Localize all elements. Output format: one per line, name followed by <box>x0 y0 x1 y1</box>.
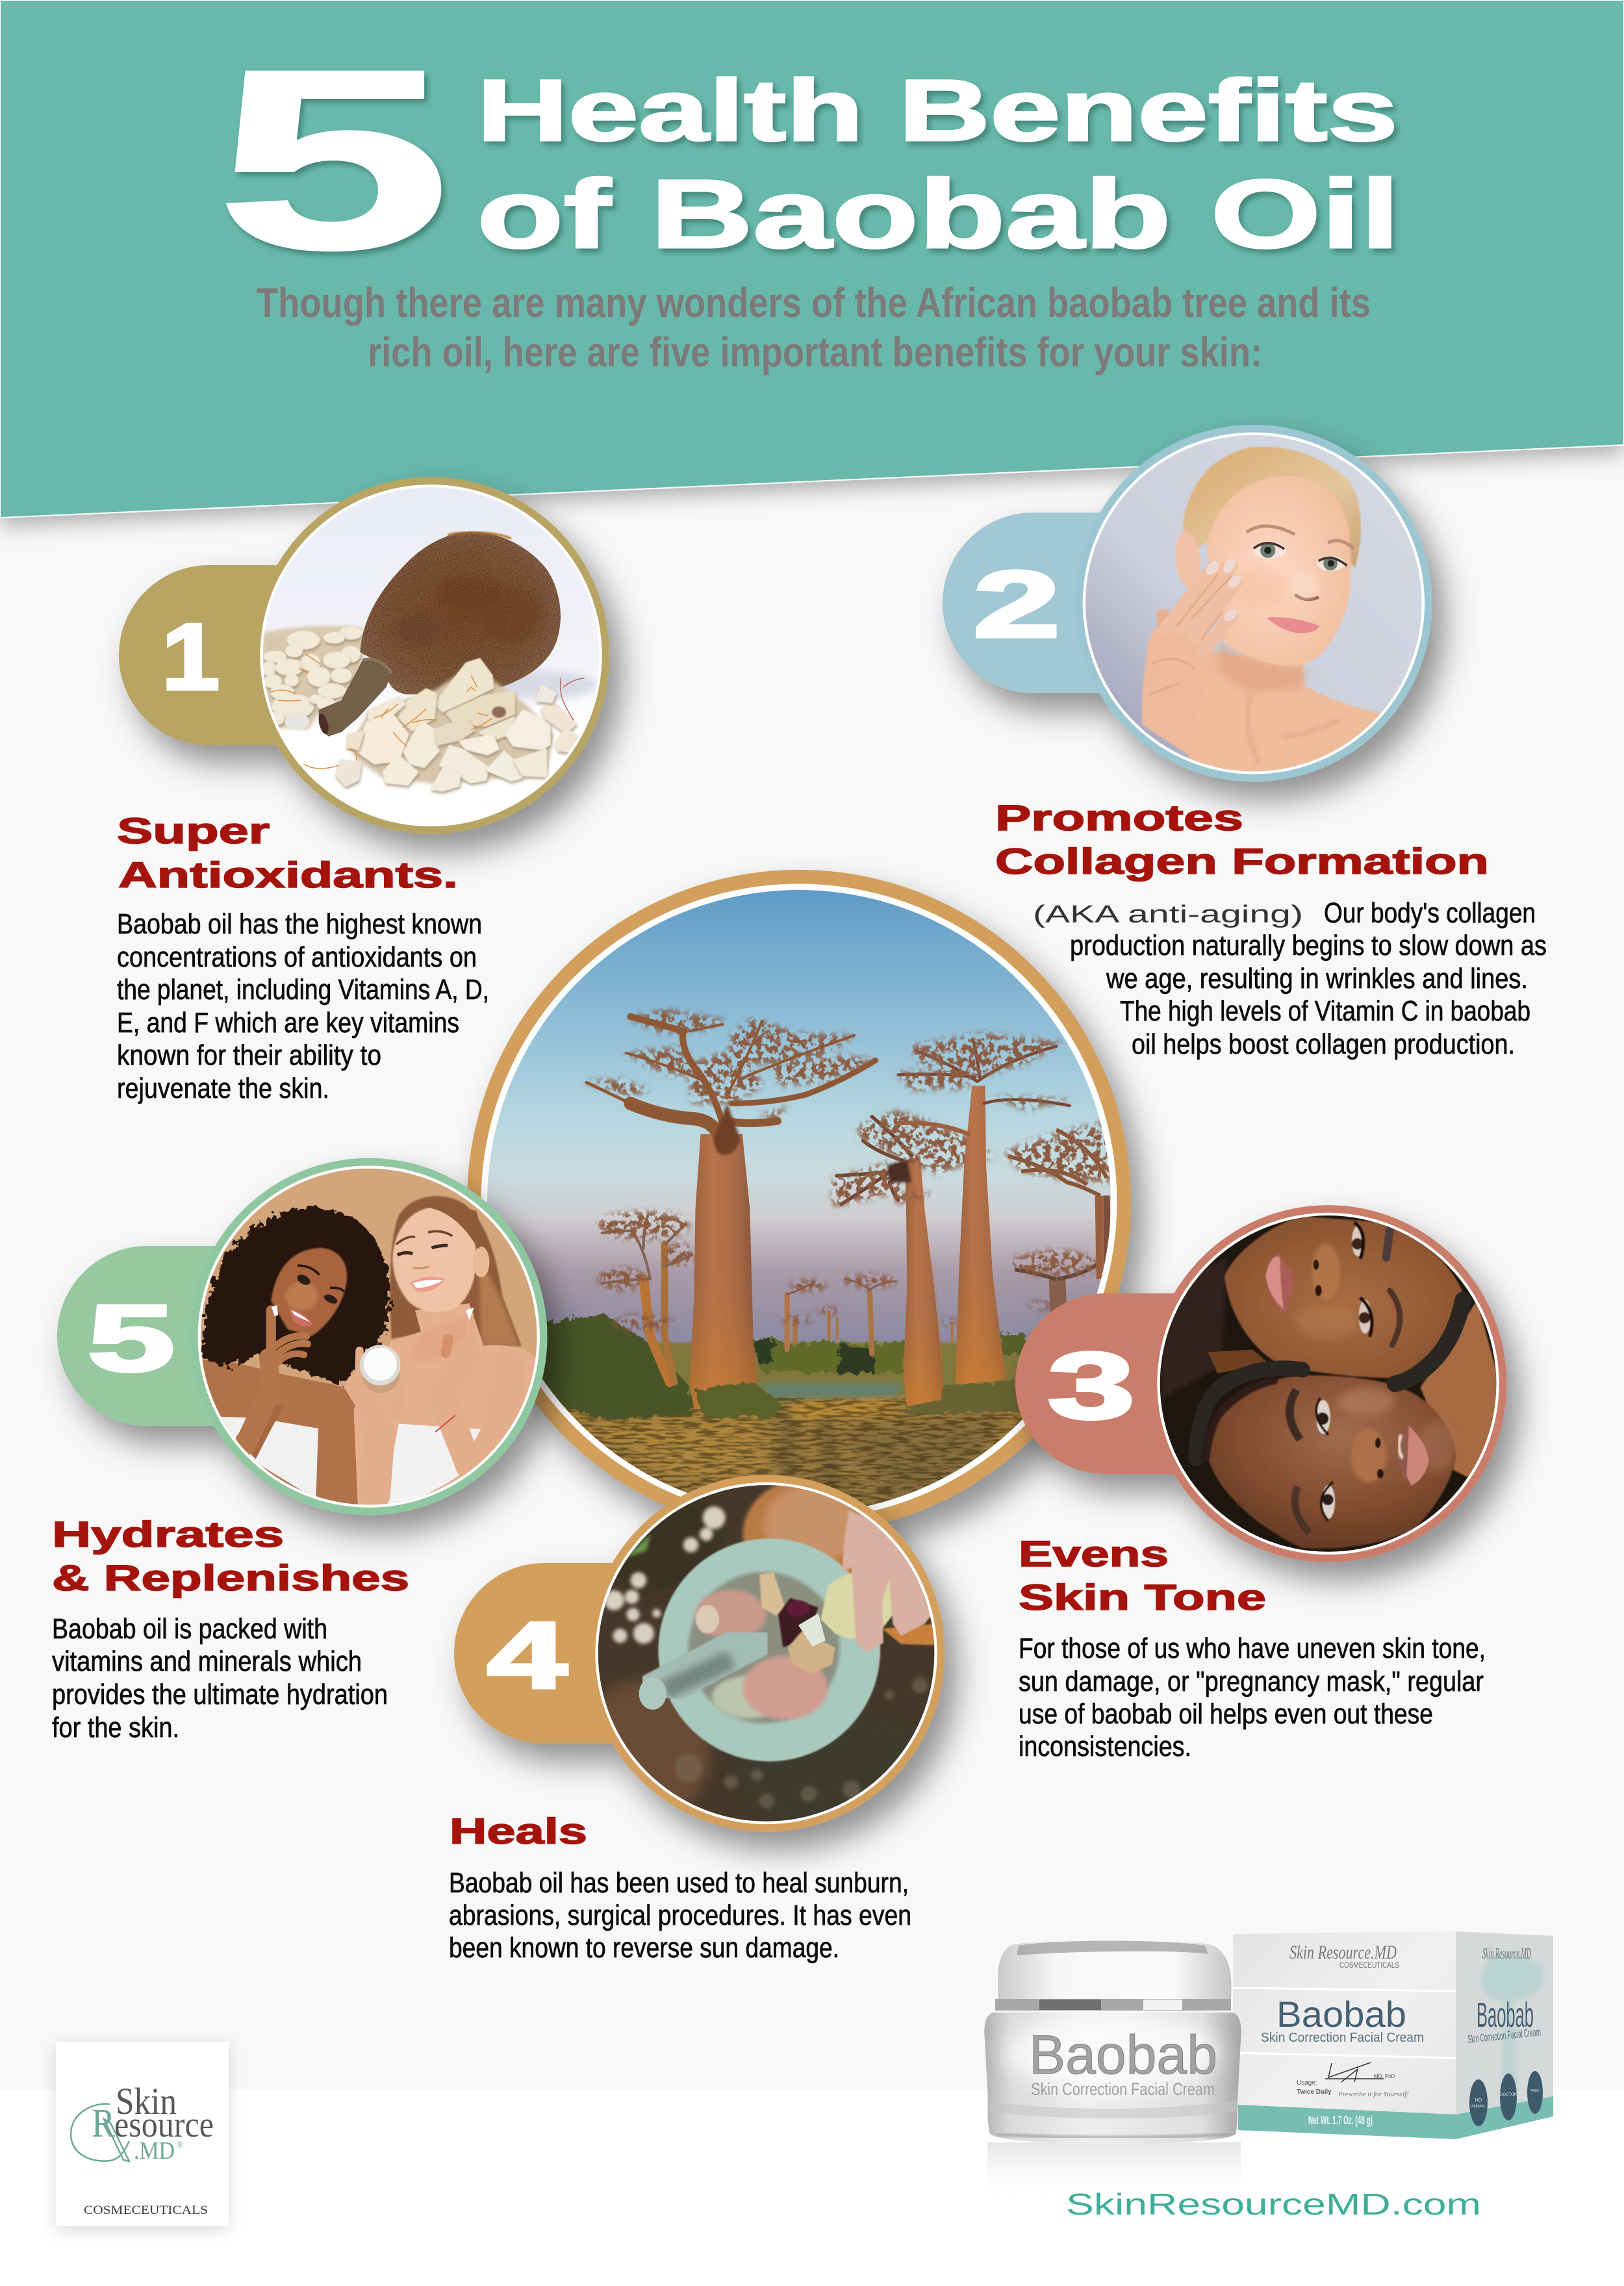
photo: baobab fruit and pulp <box>247 468 617 838</box>
bottom lips <box>1403 1425 1428 1486</box>
number 3: 3 <box>1048 1333 1135 1438</box>
jar <box>362 1355 400 1393</box>
box side text: Skin Correction Facial Cream <box>1467 2026 1542 2046</box>
logo text: ® <box>177 2140 184 2150</box>
tree 4 right edge <box>1004 1121 1111 1279</box>
body copy: the planet, including Vitamins A, D, <box>117 974 489 1006</box>
body copy: we age, resulting in wrinkles and lines. <box>1106 963 1528 995</box>
braids <box>1196 1300 1463 1458</box>
box front text <box>1261 1942 1424 2127</box>
photo: two women lying head to head <box>1147 1199 1517 1569</box>
neck shoulders <box>1187 652 1402 784</box>
right body <box>353 1303 535 1518</box>
header banner <box>0 0 1624 518</box>
product: cream jar: Skin Correction Facial Cream <box>1031 2079 1215 2099</box>
heading: Skin Tone <box>1019 1577 1266 1618</box>
pill 5 <box>57 1246 369 1426</box>
text block: Super Antioxidants <box>117 810 489 1104</box>
website url: SkinResourceMD.com <box>1066 2187 1481 2221</box>
hair <box>1183 447 1361 567</box>
subtitle <box>257 279 1371 375</box>
pill 1 <box>119 565 431 745</box>
logo text: Skin <box>116 2080 177 2122</box>
body copy <box>1019 1632 1486 1762</box>
number 5: 5 <box>88 1286 175 1391</box>
photo: mortar, pestle and oil <box>577 1468 955 1838</box>
box front text: Skin Resource.MD <box>1289 1942 1397 1963</box>
box front text: Twice Daily <box>1297 2089 1332 2096</box>
bottle <box>821 1573 895 1640</box>
stem <box>319 659 391 737</box>
heading: Heals <box>450 1810 587 1851</box>
left hand <box>245 1310 308 1445</box>
logo text: .MD <box>134 2137 175 2165</box>
body copy: vitamins and minerals which <box>52 1645 362 1677</box>
box front text: Net Wt. 1.7 Oz. (48 g) <box>1308 2114 1373 2127</box>
left face <box>271 1248 347 1336</box>
right towel <box>382 1424 487 1518</box>
top eyes and brows <box>1352 1226 1364 1256</box>
threads <box>270 654 585 768</box>
product: cream jar <box>984 1939 1241 2201</box>
left pulp pile <box>261 626 362 730</box>
jar label: Baobab <box>1029 2024 1217 2085</box>
subtitle: Though there are many wonders of the African baobab tree and its <box>257 279 1371 326</box>
logo text: esource <box>114 2105 214 2145</box>
left body <box>203 1360 359 1518</box>
box front teal band <box>1238 2105 1456 2139</box>
body copy: The high levels of Vitamin C in baobab <box>1120 995 1530 1027</box>
bush over tree 1 base <box>694 1382 780 1417</box>
far trees <box>781 1275 959 1354</box>
heading <box>1019 1533 1266 1618</box>
number 1: 1 <box>162 604 220 709</box>
jar reflection <box>987 2142 1241 2201</box>
box front text: Skin Correction Facial Cream <box>1261 2031 1424 2045</box>
product: cream box <box>1233 1931 1553 2139</box>
big numeral 5: 5 <box>215 16 451 303</box>
panel: benefit 1 Super Antioxidants badge and photo <box>119 468 617 838</box>
box side text: ANIMAL <box>1471 2105 1486 2109</box>
text block: Evens Skin Tone <box>1019 1533 1486 1762</box>
jar lid <box>998 1939 1232 2000</box>
hand <box>842 1510 932 1653</box>
box side <box>1456 1931 1553 2139</box>
top nose <box>1312 1243 1340 1300</box>
number 4: 4 <box>487 1603 567 1708</box>
logo text <box>84 2080 214 2217</box>
pestle <box>653 1638 757 1692</box>
panel: benefit 2 Promotes Collagen Formation badge and photo <box>943 416 1442 786</box>
panel: benefit 5 Hydrates and Replenishes badge and photo <box>57 1150 559 1520</box>
top lips <box>1266 1254 1293 1314</box>
body copy: Baobab oil has the highest known <box>117 908 482 940</box>
ear <box>1173 531 1203 589</box>
fruit <box>360 531 561 694</box>
box front text: Prescribe it for Yourself! <box>1338 2090 1409 2098</box>
logo swoosh <box>71 2104 129 2161</box>
subtitle: rich oil, here are five important benefits for your skin: <box>368 329 1262 375</box>
panel: benefit 3 Evens Skin Tone badge and photo <box>1015 1199 1517 1569</box>
box front text: Baobab <box>1276 1994 1406 2035</box>
right arm <box>359 1315 507 1495</box>
right face <box>392 1206 476 1312</box>
jar metal ring <box>995 1999 1231 2011</box>
text block: Promotes Collagen Formation <box>995 797 1547 1060</box>
upper face <box>1224 1216 1463 1378</box>
box side text: Skin Resource.MD <box>1482 1946 1531 1962</box>
photo: two women with cream <box>188 1150 559 1520</box>
blossoms <box>604 1506 726 1644</box>
tree 1 <box>583 1009 876 1408</box>
logo text: R <box>92 2102 116 2146</box>
title line 2: of Baobab Oil <box>477 159 1400 268</box>
lower face <box>1207 1375 1456 1549</box>
body copy: oil helps boost collagen production. <box>1132 1028 1515 1060</box>
body copy: Our body's collagen <box>1324 897 1536 929</box>
box front text: COSMECEUTICALS <box>1339 1961 1399 1970</box>
heading: Collagen Formation <box>995 841 1489 882</box>
tree 3 <box>832 1110 995 1406</box>
panel: benefit 4 Heals badge and photo <box>454 1468 955 1838</box>
body copy: concentrations of antioxidants on <box>117 941 477 973</box>
box side text: NO <box>1475 2098 1482 2103</box>
wooden bowl <box>743 1478 875 1591</box>
box side text: Baobab <box>1477 1996 1534 2035</box>
heading <box>995 797 1489 882</box>
tree 2 <box>896 1033 1074 1384</box>
contents <box>743 1656 828 1720</box>
body copy: E, and F which are key vitamins <box>117 1007 459 1039</box>
photo: woman touching face <box>1072 416 1442 786</box>
pill 2 <box>943 513 1254 693</box>
heading: Antioxidants. <box>118 854 458 895</box>
body copy: been known to reverse sun damage. <box>449 1932 839 1964</box>
title <box>215 16 1400 303</box>
body copy <box>52 1613 388 1744</box>
title line 1: Health Benefits <box>477 62 1398 159</box>
box side text: FREE <box>1530 2089 1540 2093</box>
heading: Promotes <box>995 797 1243 838</box>
heading <box>117 810 458 895</box>
box side text <box>1467 1946 1543 2126</box>
white footer band <box>0 2089 1624 2286</box>
jar glass <box>984 2013 1241 2144</box>
bottom nose <box>1351 1429 1386 1483</box>
brows eyes nose lips <box>1235 567 1287 609</box>
side tree watermark <box>1481 1953 1544 2105</box>
number 2: 2 <box>973 552 1060 657</box>
body copy: Baobab oil is packed with <box>52 1613 327 1645</box>
panel: central baobab tree photo <box>455 857 1143 1549</box>
heading: & Replenishes <box>52 1557 409 1598</box>
bushes <box>542 1314 1026 1419</box>
body copy: for the skin. <box>52 1712 179 1744</box>
body copy: use of baobab oil helps even out these <box>1019 1698 1433 1730</box>
box side teal band <box>1456 2096 1553 2139</box>
bottom eyes and brows <box>1316 1400 1330 1434</box>
body copy <box>449 1867 911 1964</box>
box front <box>1233 1931 1456 2139</box>
mortar <box>658 1538 880 1761</box>
body copy <box>1033 897 1547 1060</box>
text block: Heals <box>449 1810 911 1964</box>
ground <box>542 1343 1022 1506</box>
box front text: Usage: <box>1297 2079 1317 2087</box>
body copy: provides the ultimate hydration <box>52 1679 388 1710</box>
body copy: inconsistencies. <box>1019 1731 1191 1762</box>
pill 4 <box>454 1563 767 1744</box>
right pulp pile <box>348 664 554 784</box>
double tree left <box>598 1212 694 1382</box>
body copy: (AKA anti-aging) <box>1033 901 1303 928</box>
face <box>1206 476 1351 666</box>
box front text: MD, PhD <box>1374 2074 1395 2079</box>
logo text: COSMECEUTICALS <box>84 2203 208 2217</box>
heading: Super <box>117 810 270 851</box>
right woman hair <box>390 1196 522 1346</box>
body copy: abrasions, surgical procedures. It has even <box>449 1899 911 1931</box>
body copy: Baobab oil has been used to heal sunburn, <box>449 1867 909 1899</box>
small tree right <box>1011 1251 1099 1314</box>
brand logo card <box>56 2042 229 2226</box>
left hair <box>203 1208 390 1386</box>
heading: Evens <box>1019 1533 1169 1574</box>
heading: Hydrates <box>52 1514 284 1555</box>
heading <box>52 1514 409 1598</box>
body copy <box>117 908 489 1104</box>
body copy: For those of us who have uneven skin tone, <box>1019 1632 1486 1664</box>
body copy: production naturally begins to slow down as <box>1070 930 1547 961</box>
body copy: rejuvenate the skin. <box>117 1073 329 1104</box>
pill 3 <box>1015 1293 1328 1474</box>
body copy: known for their ability to <box>117 1039 381 1071</box>
text block: Hydrates and Replenishes <box>52 1514 409 1744</box>
box side text: DOCTOR <box>1500 2093 1517 2097</box>
body copy: sun damage, or "pregnancy mask," regular <box>1019 1666 1484 1697</box>
left towel <box>217 1417 318 1499</box>
hand <box>1142 566 1236 756</box>
